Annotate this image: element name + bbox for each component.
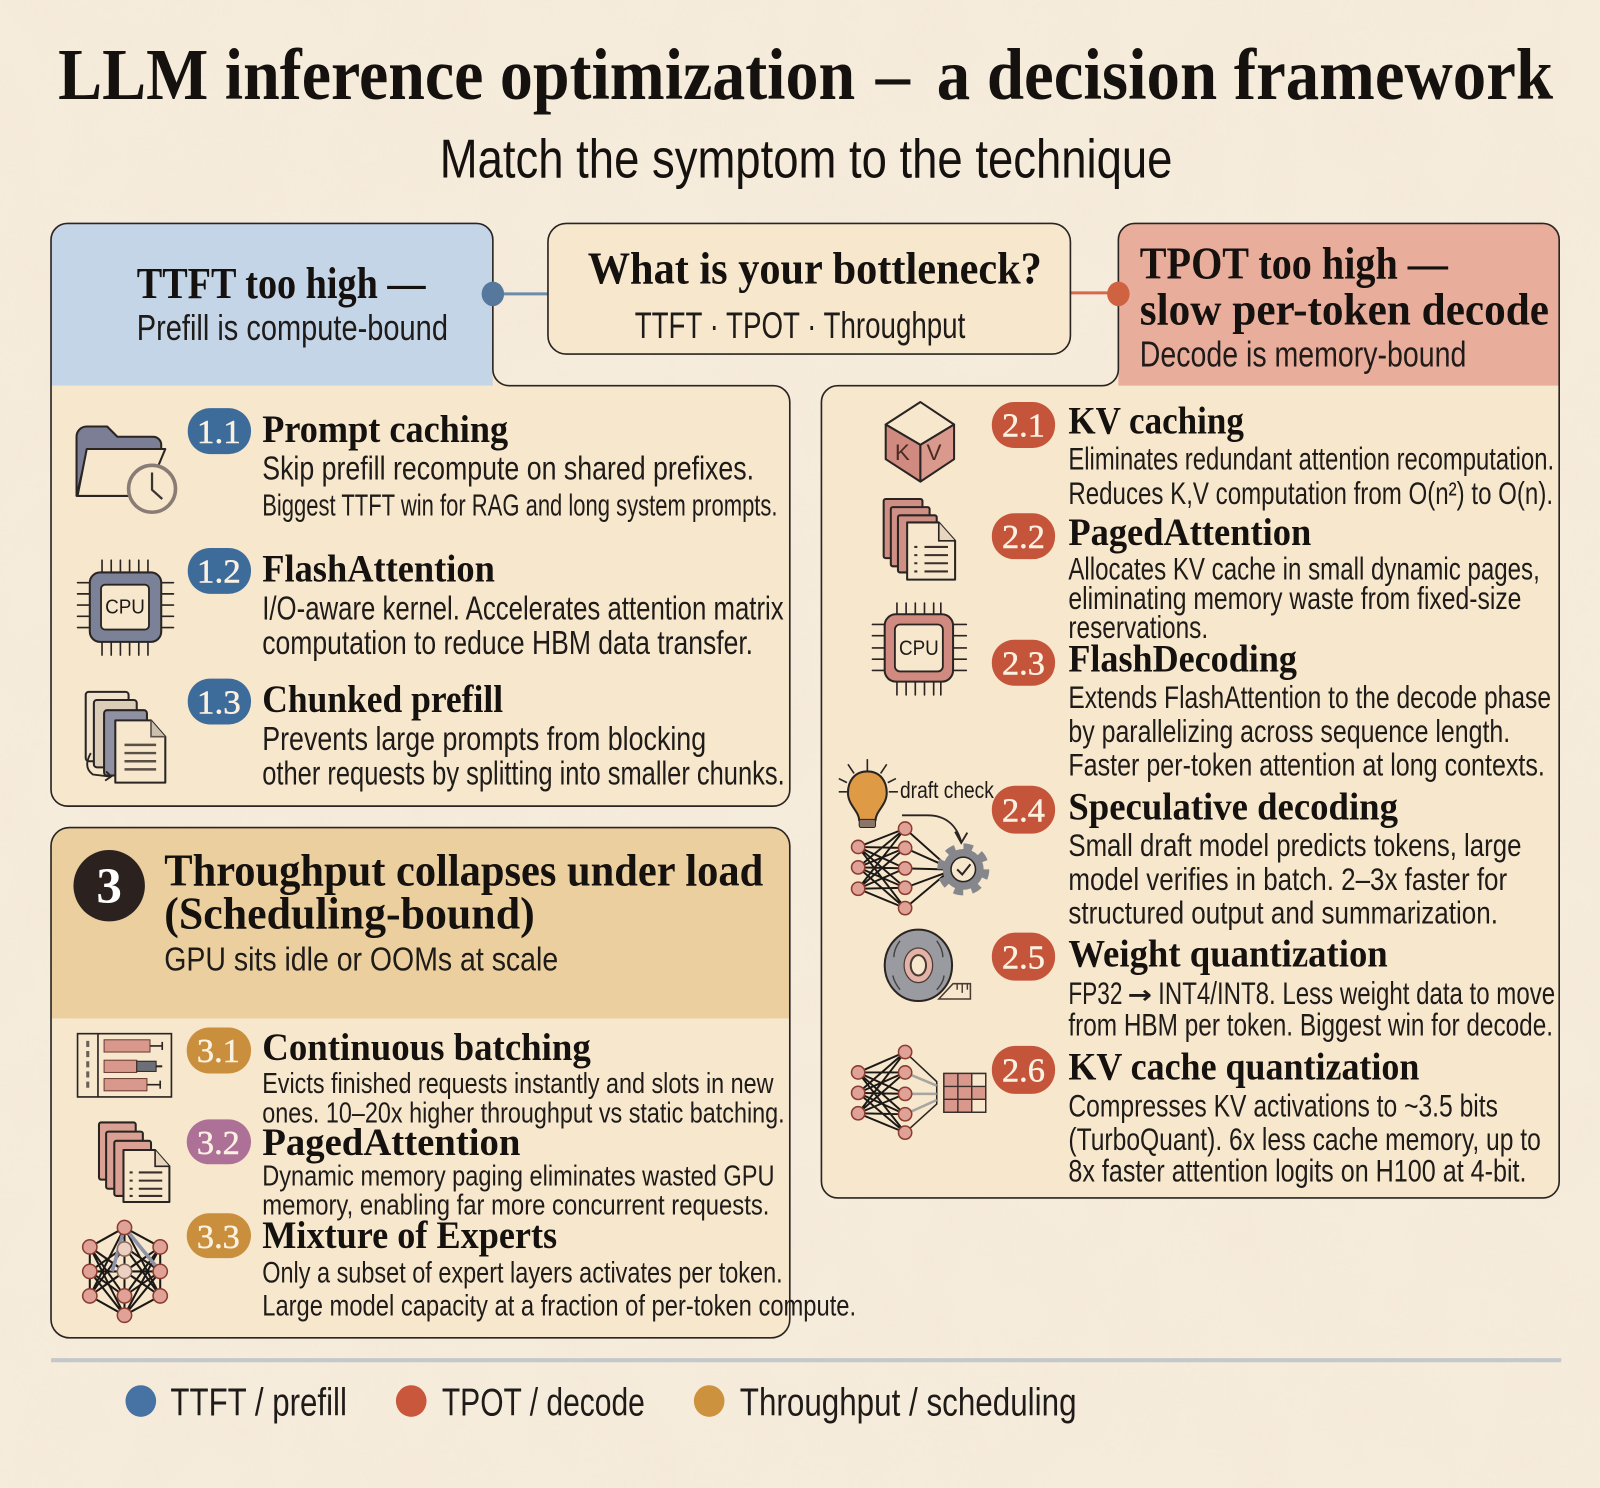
heading: Continuous batching (262, 1026, 591, 1069)
icon: KV cube: K (895, 440, 910, 465)
question heading: What is your bottleneck? (588, 243, 1042, 294)
description (262, 590, 784, 662)
badge 1.1: 1.1 (197, 414, 241, 451)
badge 2.3 (992, 640, 1055, 686)
description: Prevents large prompts from blocking (262, 721, 706, 758)
heading: PagedAttention (1068, 511, 1311, 554)
title: LLM inference optimization (58, 34, 855, 115)
section number 3 (73, 850, 145, 921)
description: Evicts finished requests instantly and slots in new (262, 1068, 774, 1100)
item 2.3 FlashDecoding (872, 603, 1551, 783)
icon: KV cube: V (927, 440, 942, 465)
description: computation to reduce HBM data transfer. (262, 625, 753, 662)
panel 3: throughput collapses (51, 828, 856, 1338)
badge 2.1: 2.1 (1002, 408, 1045, 445)
legend: TPOT / decode (396, 1381, 645, 1424)
item 2.4 speculative decoding (839, 759, 1521, 930)
center box: bottleneck question (548, 223, 1070, 354)
legend: TPOT / decode: TPOT / decode (442, 1381, 645, 1424)
legend: Throughput / scheduling: Throughput / scheduling (740, 1381, 1077, 1424)
panel 2 outline (821, 223, 1559, 1198)
panel 3 heading (164, 845, 764, 939)
description (262, 721, 785, 793)
subtitle: Match the symptom to the technique (440, 128, 1172, 190)
title (58, 34, 1553, 115)
badge 1.3: 1.3 (197, 684, 241, 721)
panel 1: TTFT too high (51, 223, 790, 806)
heading: FlashDecoding (1068, 637, 1297, 680)
heading: KV cache quantization (1068, 1046, 1419, 1089)
description: I/O-aware kernel. Accelerates attention matrix (262, 590, 784, 627)
item 2.1 KV caching (886, 400, 1554, 511)
item 1.2 FlashAttention (78, 548, 784, 662)
connector dot: TTFT (482, 282, 504, 306)
icon: CPU chip red: CPU (899, 636, 939, 660)
badge 3.1: 3.1 (197, 1033, 240, 1070)
description (1068, 827, 1521, 930)
item 3.2 PagedAttention (99, 1119, 774, 1221)
icon: network with grid (852, 1045, 986, 1139)
panel 2 subheading: Decode is memory-bound (1140, 334, 1466, 374)
panel 2: TPOT too high (821, 223, 1559, 1198)
icon: folder with clock (77, 427, 176, 512)
icon: disk and ruler (885, 930, 970, 1001)
description (262, 1068, 785, 1129)
badge 1.3 (188, 679, 251, 724)
description (1068, 679, 1551, 783)
badge 3.3 (187, 1213, 251, 1258)
icon: draft model and verifier (839, 759, 986, 915)
panel 2 heading: slow per-token decode (1140, 283, 1549, 334)
title: — (875, 34, 910, 115)
section number 3: 3 (96, 859, 122, 915)
badge 3.2: 3.2 (197, 1125, 240, 1162)
panel 2 header band (1112, 223, 1559, 386)
panel 3 outline (51, 828, 790, 1338)
heading: KV caching (1068, 400, 1244, 443)
item 1.3 chunked prefill (86, 678, 785, 793)
description: ones. 10–20x higher throughput vs static batching. (262, 1097, 785, 1129)
description (1068, 975, 1555, 1043)
description: Biggest TTFT win for RAG and long system prompts. (262, 488, 778, 522)
icon: document stack (86, 692, 165, 783)
icon: batch slots (78, 1034, 171, 1097)
badge 2.6: 2.6 (1002, 1053, 1045, 1090)
item 2.5 weight quantization (885, 930, 1555, 1043)
item 3.1 continuous batching (78, 1026, 785, 1129)
heading: Speculative decoding (1068, 785, 1398, 828)
panel 1 header band (51, 223, 497, 386)
panel 1 heading: TTFT too high — (137, 258, 426, 308)
badge 2.3: 2.3 (1002, 645, 1045, 682)
icon label: draft check: draft check (900, 777, 994, 803)
panel 3 heading: Throughput collapses under load (164, 845, 764, 896)
badge 2.4: 2.4 (1002, 792, 1045, 829)
icon: memory pages (884, 499, 955, 580)
heading: Prompt caching (262, 408, 508, 451)
item 2.2 PagedAttention (884, 499, 1540, 645)
badge 2.1 (992, 402, 1055, 448)
panel 3 header band (52, 828, 789, 847)
title: a decision framework (937, 34, 1553, 115)
icon: KV cube (886, 402, 954, 482)
heading: Mixture of Experts (262, 1214, 557, 1257)
panel 2 heading: TPOT too high — (1140, 238, 1449, 289)
description: other requests by splitting into smaller chunks. (262, 756, 785, 793)
icon: expert network (83, 1220, 167, 1322)
heading: Weight quantization (1068, 932, 1388, 975)
badge 2.5 (992, 933, 1055, 981)
heading: PagedAttention (262, 1121, 520, 1164)
badge 3.2 (187, 1119, 251, 1164)
heading: FlashAttention (262, 548, 495, 591)
description: Skip prefill recompute on shared prefixes. (262, 451, 754, 488)
description: structured output and summarization. (1068, 894, 1498, 930)
item 2.6 KV cache quantization (852, 1045, 1541, 1189)
connector dot: TPOT (1107, 282, 1130, 306)
icon: CPU chip: CPU (105, 596, 145, 618)
badge 1.2: 1.2 (197, 554, 241, 591)
question subtext: TTFT · TPOT · Throughput (635, 305, 965, 346)
description: model verifies in batch. 2–3x faster for (1068, 861, 1507, 897)
panel 1 subheading: Prefill is compute-bound (137, 308, 448, 348)
description (262, 1161, 774, 1221)
badge 2.6 (992, 1046, 1055, 1094)
connector: bottleneck to TPOT (1070, 291, 1118, 294)
icon: memory pages (99, 1122, 169, 1202)
panel 3 heading: (Scheduling-bound) (164, 888, 535, 939)
item 1.1 prompt caching (77, 408, 778, 522)
legend: TTFT / prefill (126, 1381, 347, 1424)
description: Only a subset of expert layers activates per token. (262, 1257, 783, 1290)
item 3.3 mixture of experts (83, 1213, 856, 1322)
description (262, 1257, 856, 1322)
panel 2 heading (1140, 238, 1549, 334)
description (1068, 551, 1540, 645)
legend: TTFT / prefill: TTFT / prefill (170, 1381, 347, 1424)
description (262, 451, 778, 522)
panel 1 outline (51, 223, 790, 806)
description: reservations. (1068, 609, 1208, 645)
description: Dynamic memory paging eliminates wasted GPU (262, 1161, 774, 1193)
description (1068, 440, 1554, 511)
description: FP32 (1068, 975, 1122, 1011)
badge 3.1 (187, 1028, 251, 1073)
description: memory, enabling far more concurrent requests. (262, 1189, 769, 1221)
badge 2.2: 2.2 (1002, 519, 1045, 556)
badge 2.5: 2.5 (1002, 939, 1045, 976)
badge 1.2 (188, 548, 251, 594)
description (1068, 1087, 1541, 1189)
panel 3 header filler (51, 847, 790, 1018)
legend (126, 1381, 1077, 1424)
badge 1.1 (188, 408, 251, 454)
badge 3.3: 3.3 (197, 1219, 240, 1256)
icon: CPU chip (78, 560, 173, 655)
panel 3 subheading: GPU sits idle or OOMs at scale (164, 941, 558, 978)
connector: bottleneck to TTFT (493, 292, 548, 295)
heading: Chunked prefill (262, 678, 503, 721)
icon: CPU chip red (872, 603, 966, 695)
badge 2.2 (992, 513, 1055, 559)
description: → (1128, 980, 1152, 1009)
badge 2.4 (992, 786, 1055, 834)
description: Large model capacity at a fraction of per-token compute. (262, 1289, 856, 1322)
